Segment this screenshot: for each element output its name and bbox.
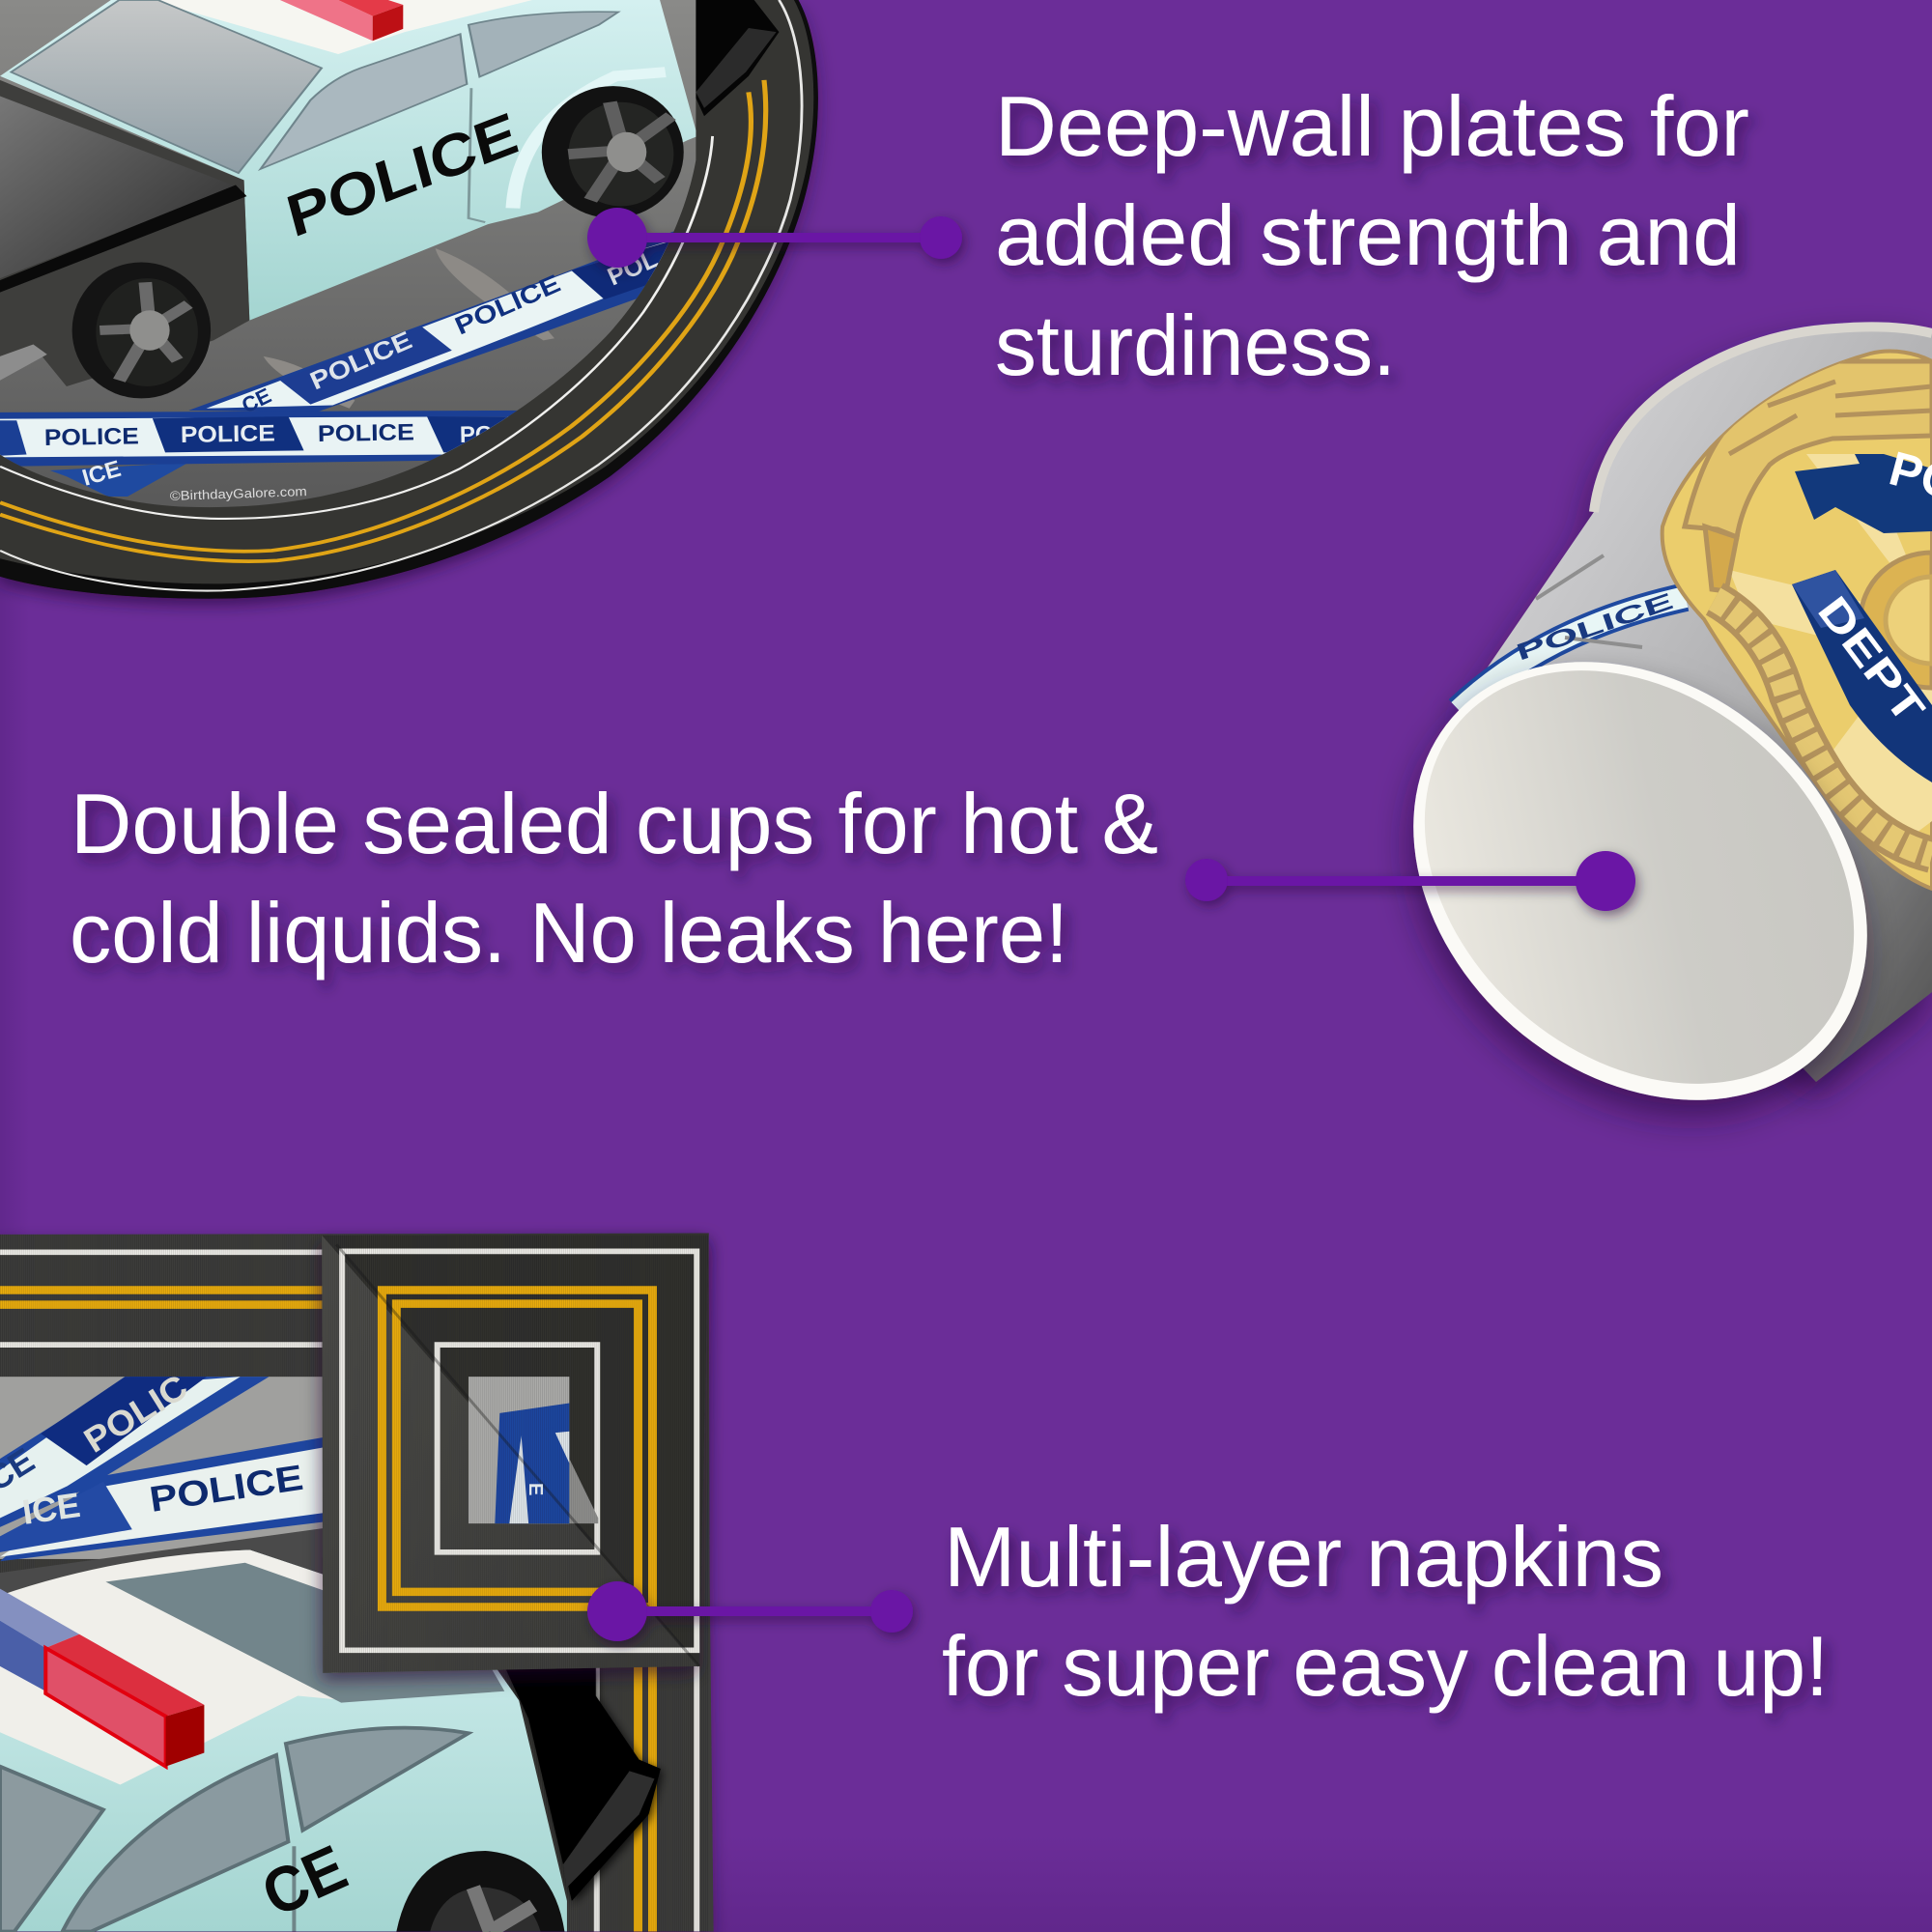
tape horizontal [0, 411, 526, 467]
callout: plate text: added strength and [995, 187, 1741, 283]
tape labels: POLICE [181, 420, 275, 448]
connector: napkin [587, 1581, 913, 1641]
car spoiler [504, 1666, 661, 1901]
front wheel [72, 262, 211, 398]
tape labels: PO [460, 421, 494, 448]
cup tape: POLICE [1513, 588, 1677, 667]
tape labels: ©BirthdayGalore.com [170, 484, 307, 503]
callout: napkin text: Multi-layer napkins [944, 1509, 1663, 1605]
panel: paper plate with police car [0, 0, 818, 599]
napkin tape labels: POLICE [147, 1458, 305, 1520]
panel: paper cup with badge [1389, 319, 1932, 1138]
folded napkin corner [322, 1234, 709, 1673]
tape labels: CE [238, 384, 275, 417]
callout: plate text: sturdiness. [995, 298, 1396, 393]
car door label: CE [252, 1831, 356, 1930]
connector: plate [587, 208, 962, 268]
car spoiler [660, 0, 779, 116]
tape labels: POLICE [44, 423, 139, 451]
plate centre scene [0, 0, 721, 521]
callout: cup text [70, 776, 1158, 980]
napkin car print [0, 1377, 661, 1931]
police car [0, 0, 697, 398]
callout: cup text: Double sealed cups for hot & [71, 776, 1158, 871]
tape lower [50, 463, 188, 497]
tape labels: POLICE [305, 326, 416, 395]
callout: napkin text [942, 1509, 1829, 1714]
callout: napkin text: for super easy clean up! [942, 1618, 1829, 1714]
car door label: POLICE [280, 99, 525, 250]
tape labels: POL [603, 243, 662, 291]
connector: cup [1185, 851, 1635, 911]
car body [0, 1549, 567, 1931]
rear wheel [396, 1851, 564, 1931]
gold badge [1662, 352, 1932, 889]
napkin tape labels: POLIC [77, 1366, 194, 1461]
callout: plate text: Deep-wall plates for [995, 78, 1749, 174]
tape labels [44, 243, 662, 503]
tape labels: POLICE [318, 419, 414, 447]
cup body [1460, 327, 1932, 1082]
callout: plate text [995, 78, 1749, 393]
tape diagonal [188, 228, 682, 412]
panel: folded napkin with police car [0, 1234, 714, 1931]
napkin tape labels: ICE [19, 1485, 83, 1532]
napkin tape labels [0, 1366, 305, 1532]
cup tape [1459, 555, 1686, 710]
tape labels: POLICE [450, 269, 564, 340]
callout: cup text: cold liquids. No leaks here! [70, 885, 1068, 980]
plate rim [0, 0, 818, 599]
napkin sheet [0, 1234, 714, 1931]
light bar [0, 1589, 79, 1648]
tape labels: ICE [79, 456, 124, 492]
rear wheel [542, 86, 684, 218]
gold badge: DEPT [1808, 588, 1932, 732]
tape [0, 1377, 270, 1527]
cup base [1325, 572, 1932, 1190]
window label: E [525, 1483, 546, 1495]
